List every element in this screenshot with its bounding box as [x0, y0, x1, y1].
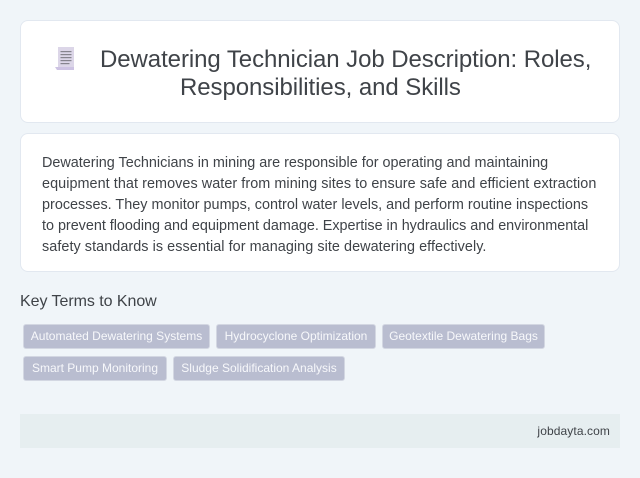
tag [23, 356, 167, 381]
title [100, 46, 591, 101]
icon: document scroll [55, 47, 74, 70]
heading: key terms: Key Terms to Know [20, 293, 157, 310]
tag: Smart Pump Monitoring [32, 361, 158, 375]
text block: description: safety standards is essential for managing site dewatering effectively. [42, 239, 486, 255]
title: Responsibilities, and Skills [180, 74, 461, 101]
tag [216, 324, 376, 349]
tag [23, 324, 210, 349]
tag: Hydrocyclone Optimization [225, 329, 367, 343]
text block: description [42, 155, 596, 255]
panel: description [20, 133, 620, 272]
tag [173, 356, 345, 381]
text block: description: equipment that removes water from mining sites to ensure safe and efficient extraction [42, 176, 596, 192]
tag: Sludge Solidification Analysis [181, 361, 337, 375]
footer text: jobdayta.com [537, 424, 610, 438]
panel: title card [20, 20, 620, 123]
tag: Geotextile Dewatering Bags [389, 329, 538, 343]
title: Dewatering Technician Job Description: Roles, [100, 46, 591, 73]
footer bar [20, 414, 620, 448]
tag: Automated Dewatering Systems [31, 329, 202, 343]
tag [382, 324, 545, 349]
panel: key term tags [23, 324, 545, 381]
text block: description: to prevent flooding and equipment damage. Expertise in hydraulics and environmental [42, 218, 588, 234]
text block: description: Dewatering Technicians in mining are responsible for operating and maintaining [42, 155, 548, 171]
text block: description: processes. They monitor pumps, control water levels, and perform routine inspections [42, 197, 588, 213]
